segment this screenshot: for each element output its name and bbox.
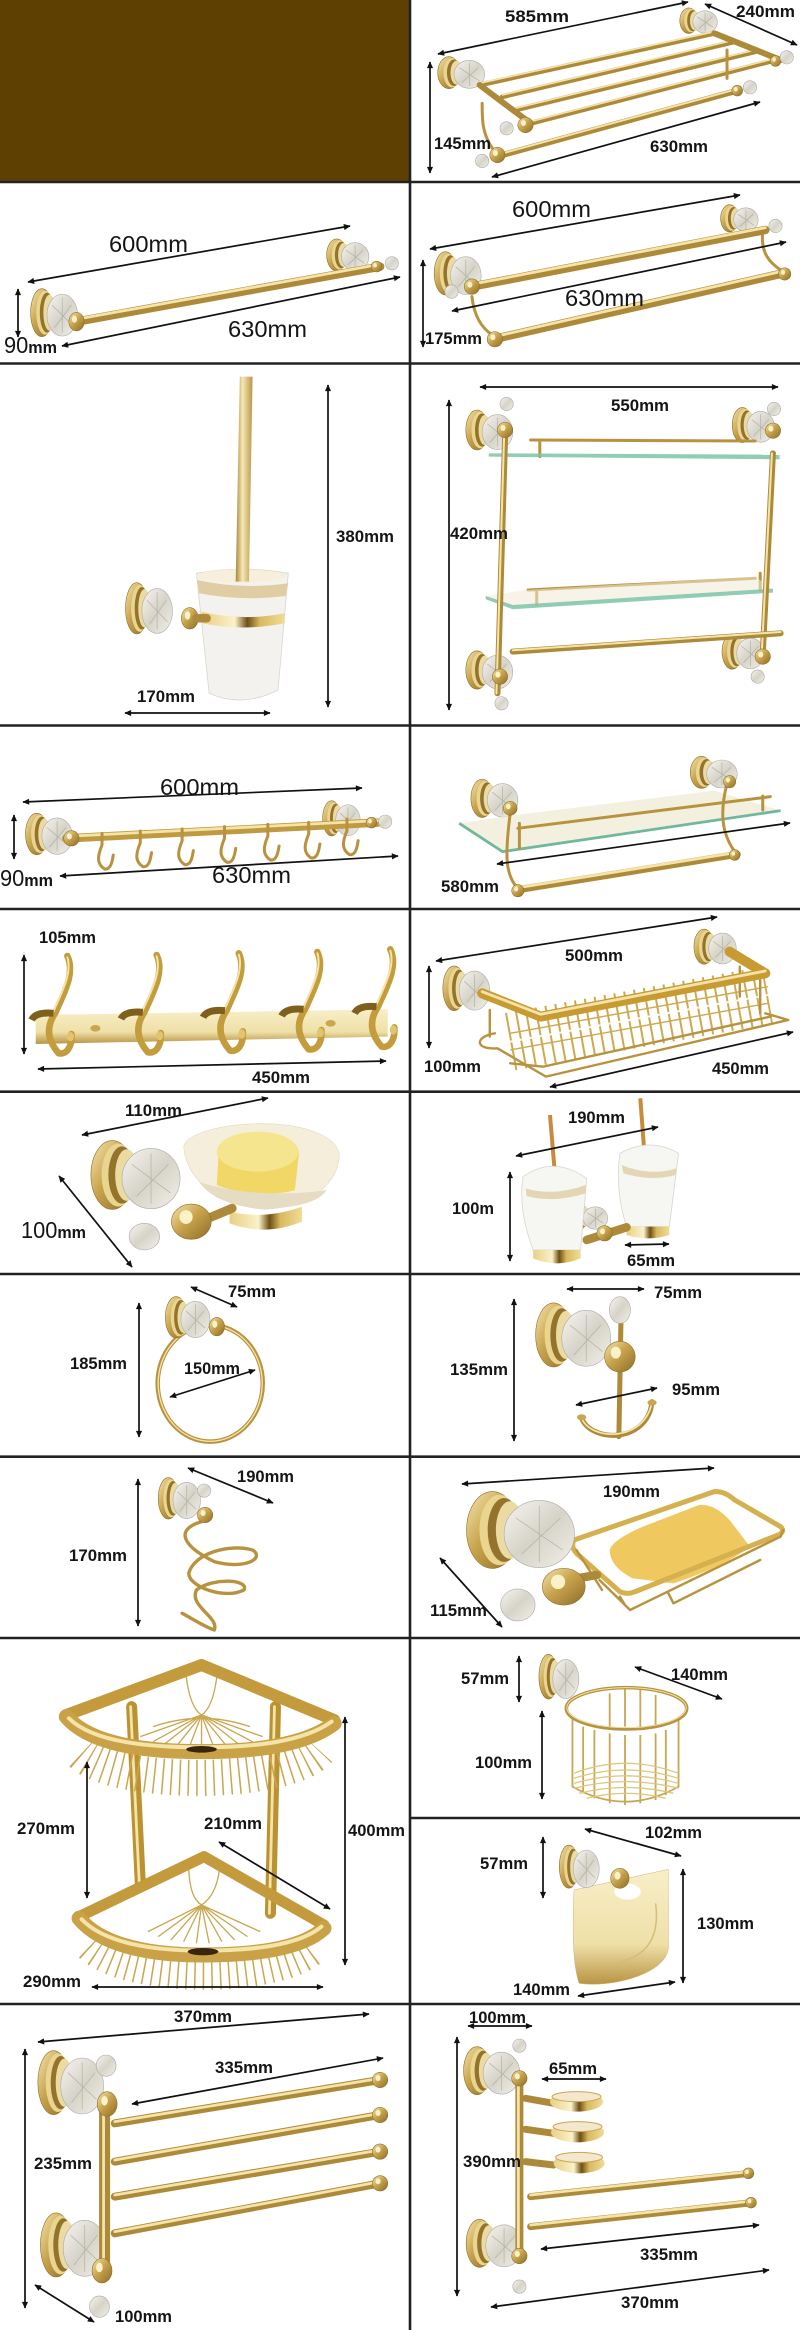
label: 75mm: 75mm [654,1283,702,1302]
dimension arrows [514,1289,657,1441]
label: 130mm: 130mm [697,1914,754,1933]
label: 95mm: 95mm [672,1380,720,1399]
label: 57mm: 57mm [480,1854,528,1873]
label: 140mm: 140mm [513,1980,570,1999]
illustration: seven hook rail [26,801,392,869]
label: 102mm: 102mm [645,1823,702,1842]
illustration: swivel towel arms [38,2051,388,2317]
label: 190mm: 190mm [568,1108,625,1127]
label: 175mm: 175mm [425,329,482,348]
panel: hook rail [0,728,409,908]
dimension arrows [139,1287,255,1437]
label: 75mm: 75mm [228,1282,276,1301]
label: 100mm: 100mm [424,1057,481,1076]
panel: toilet paper holder [411,1820,800,2003]
label: 335mm: 335mm [640,2245,698,2264]
label: 135mm: 135mm [450,1360,508,1379]
bottom tier [79,1857,324,1975]
panel: wire paper basket [411,1640,800,1817]
illustration: covered toilet paper holder [559,1845,668,1984]
illustration: single towel bar [31,239,398,337]
dimension arrows [510,1127,669,1261]
illustration: ceramic soap dish with yellow soap [91,1124,339,1250]
dimension arrows [440,1468,714,1627]
label: 630mm: 630mm [650,137,708,156]
label: 420mm: 420mm [450,524,508,543]
label: 57mm: 57mm [461,1669,509,1688]
label: 170mm: 170mm [69,1546,127,1565]
illustration: wire basket [443,929,788,1077]
panel: arms with cup rings [411,2006,800,2330]
label: 110mm: 110mm [125,1101,182,1120]
label: 550mm: 550mm [611,396,669,415]
label: 140mm: 140mm [671,1665,728,1684]
dimension arrow [497,823,790,864]
illustration: swivel arms with cup rings [464,2039,756,2293]
label: 390mm: 390mm [463,2152,521,2171]
illustration: folding towel rack [438,8,793,168]
label: 450mm: 450mm [712,1059,769,1078]
illustration: towel ring [158,1297,263,1442]
label: 105mm: 105mm [39,928,96,947]
illustration: round wire basket [539,1654,687,1805]
panel: hair dryer holder [0,1459,409,1637]
panel: double glass shelf [411,365,800,725]
label: 100mm: 100mm [475,1753,532,1772]
panel: wire wall basket [411,911,800,1091]
dimension arrows [14,788,398,876]
panel: two tier corner basket [0,1640,409,2003]
label: 190mm: 190mm [237,1467,294,1486]
panel: soap cup holder [0,1094,409,1273]
label: 235mm: 235mm [34,2154,92,2173]
label: 370mm: 370mm [174,2007,232,2026]
top tier [66,1665,334,1778]
label: 270mm: 270mm [17,1819,75,1838]
label: 600mm: 600mm [512,196,591,222]
label: 90mm: 90mm [0,865,53,891]
dimension arrows [457,2026,769,2307]
dimension arrows [423,195,786,347]
panel: single towel bar [0,184,409,362]
label: 580mm: 580mm [441,877,499,896]
dimension arrows [543,1829,683,1996]
panel: towel rack with shelf [411,0,800,181]
illustration: five double hooks [32,949,397,1054]
illustration: double glass shelf [466,397,781,710]
dimension arrows [449,387,778,710]
label: 100mm: 100mm [21,1217,86,1243]
label: 450mm: 450mm [252,1068,310,1087]
label: 400mm: 400mm [348,1821,405,1840]
label: 240mm: 240mm [736,2,795,21]
dimension arrows [430,2,797,177]
dimension arrows [125,385,328,713]
label: 500mm: 500mm [565,946,623,965]
illustration: double towel bar [434,205,791,347]
dimension arrows [18,226,400,346]
label: 100mm: 100mm [115,2307,172,2326]
illustration: glass shelf [459,756,781,897]
dimension arrows [25,2014,383,2322]
panel: toilet brush holder [0,365,409,725]
dimension arrows [429,917,793,1087]
label: 65mm: 65mm [627,1251,675,1270]
panel: towel ring [0,1276,409,1456]
label: 290mm: 290mm [23,1972,81,1991]
label: 100m: 100m [452,1199,494,1218]
illustration: double toothbrush tumblers [522,1098,679,1263]
label: 600mm: 600mm [160,774,239,800]
label: 210mm: 210mm [204,1814,262,1833]
panel: robe hook [411,1276,800,1456]
label: 100mm: 100mm [469,2008,526,2027]
illustration: robe hook [536,1297,657,1437]
dimension arrows [519,1656,722,1799]
label: 115mm: 115mm [430,1601,487,1620]
label: 90mm: 90mm [4,332,57,358]
dimension arrows [59,1098,268,1267]
label: 145mm: 145mm [434,134,491,153]
illustration: spiral hair dryer holder [158,1478,256,1630]
label: 335mm: 335mm [215,2058,273,2077]
label: 585mm: 585mm [505,7,569,26]
panel: double tumbler holder [411,1094,800,1273]
panel: four arm towel rack [0,2006,409,2330]
panel: double towel bar [411,184,800,362]
label: 65mm: 65mm [549,2059,597,2078]
label: 630mm: 630mm [228,316,307,342]
dimension arrows [24,955,386,1069]
panel: coat hook rail [0,911,409,1091]
label: 380mm: 380mm [336,527,394,546]
panel: wire soap dish [411,1459,800,1637]
label: 185mm: 185mm [70,1354,127,1373]
illustration: toilet brush and cup [126,377,288,700]
illustration: corner shelf baskets [66,1665,334,1975]
label: 600mm: 600mm [109,231,188,257]
panel: brown colour block [0,0,409,181]
dimension arrows [138,1468,273,1626]
label: 630mm: 630mm [212,862,291,888]
label: 170mm: 170mm [137,687,195,706]
illustration: wire soap dish with soap [467,1492,783,1621]
label: 630mm: 630mm [565,285,644,311]
label: 370mm: 370mm [621,2293,679,2312]
dimension arrows [87,1717,345,1987]
label: 150mm: 150mm [184,1359,240,1378]
label: 190mm: 190mm [603,1482,660,1501]
panel: glass shelf with towel bar [411,728,800,908]
